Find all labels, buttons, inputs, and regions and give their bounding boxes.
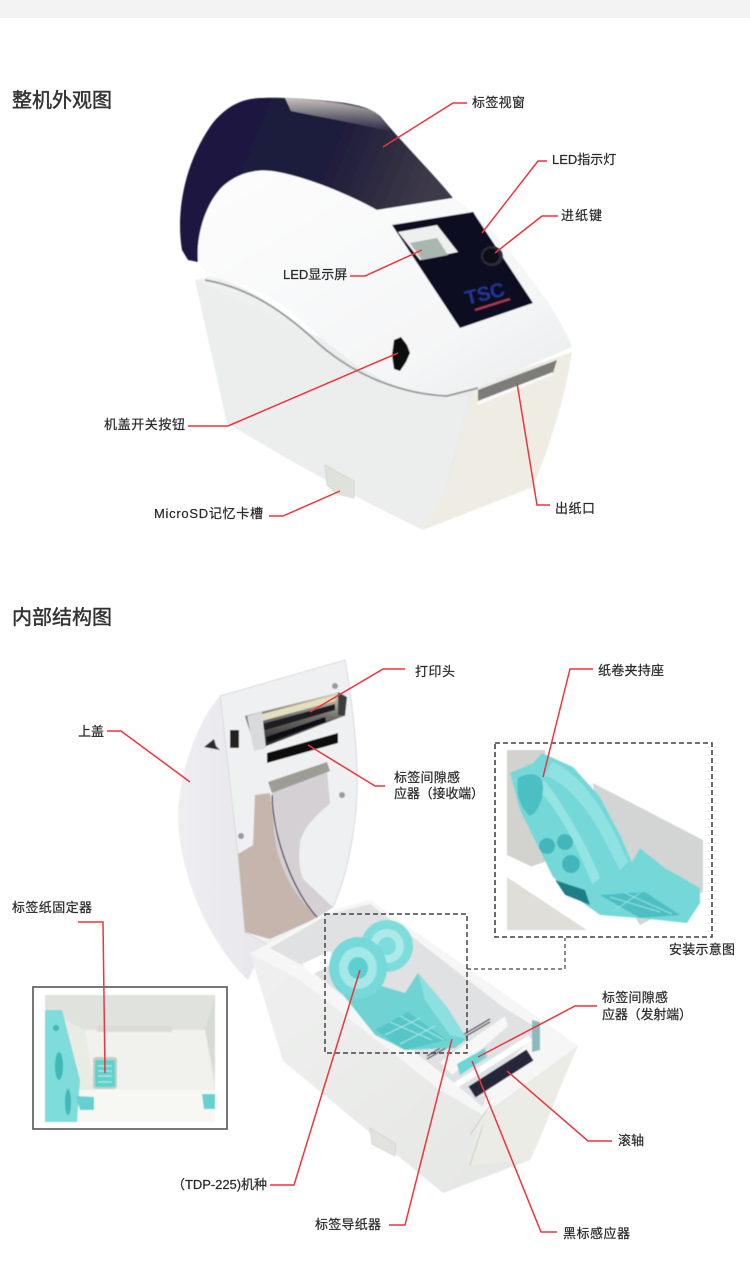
callout: black mark sensor (472, 1061, 630, 1241)
LED screen (398, 225, 458, 260)
callout: gap sensor receiver (308, 745, 484, 801)
callout: paper exit: 出纸口 (555, 501, 595, 516)
logo: TSC: TSC (463, 279, 507, 310)
gap sensor receiver bar (267, 733, 338, 763)
callout: paper roll holder (543, 663, 664, 777)
printer base (195, 276, 572, 530)
white top shell (198, 171, 572, 395)
base inner cavity (270, 904, 540, 1107)
base slot cover (370, 1128, 396, 1156)
top band (0, 0, 750, 18)
callout: TDP-225 model (172, 970, 360, 1192)
callout: cover release (104, 353, 398, 432)
callout: paper roll holder: 纸卷夹持座 (598, 663, 664, 678)
label fixer (93, 1057, 117, 1089)
callout: gap sensor receiver: 标签间隙感 (394, 770, 460, 785)
screw holes (238, 683, 345, 839)
callout: LED indicator: LED指示灯 (552, 152, 616, 167)
inset: installation detail (495, 743, 712, 937)
base outer body (250, 900, 578, 1193)
callout: feed key (495, 208, 602, 253)
front fold (470, 1046, 578, 1165)
callout: label window (383, 95, 525, 147)
callout: black mark sensor: 黑标感应器 (563, 1226, 630, 1241)
dashed connector (467, 938, 565, 969)
front face (423, 352, 572, 530)
inset: label holder detail (33, 987, 227, 1129)
callout: roller: 滚轴 (618, 1133, 644, 1148)
callout: MicroSD slot (154, 491, 340, 521)
callout: paper guide (315, 1039, 452, 1232)
inset photo (507, 750, 703, 930)
printer exterior illustration (180, 98, 572, 530)
inset photo (45, 995, 215, 1122)
callout: TDP-225 model: （TDP-225)机种 (172, 1177, 267, 1192)
callout: print head: 打印头 (415, 664, 455, 679)
paper exit slot (478, 360, 557, 405)
heading: exterior view: 整机外观图 (12, 89, 112, 112)
sensor emitter (457, 1048, 487, 1075)
callout: LED display (283, 250, 422, 282)
cover release button (392, 337, 410, 371)
lid inner surface (220, 660, 357, 946)
callout: paper exit (517, 383, 595, 516)
roller (456, 1038, 530, 1085)
callout: label holder: 标签纸固定器 (12, 900, 92, 915)
seam line (205, 280, 478, 396)
roller bracket (532, 1020, 540, 1052)
lid outer shell (178, 660, 357, 980)
callout: feed key: 进纸键 (561, 208, 602, 223)
callout: MicroSD slot: MicroSD记忆卡槽 (154, 506, 263, 521)
roll holder teal (510, 753, 700, 923)
callout: gap sensor emitter: 标签间隙感 (602, 990, 668, 1005)
feed button (481, 246, 503, 266)
callout: gap sensor receiver: 应器（接收端） (394, 786, 484, 801)
callout: cover release: 机盖开关按钮 (104, 417, 185, 432)
control panel (392, 212, 533, 328)
callout: label holder (12, 900, 105, 1073)
caption: installation diagram: 安装示意图 (669, 942, 735, 957)
callout: LED indicator (482, 152, 616, 233)
lid latch (204, 730, 239, 750)
dark label window cover (180, 98, 453, 262)
callout: roller (507, 1071, 644, 1148)
paper guide, teal (329, 920, 467, 1050)
callout: label window: 标签视窗 (472, 95, 525, 110)
heading: internal structure: 内部结构图 (12, 606, 112, 629)
callout: gap sensor emitter (478, 990, 692, 1057)
callout: print head (310, 664, 455, 712)
callout: paper guide: 标签导纸器 (315, 1217, 381, 1232)
lid inner brown lining (238, 793, 317, 939)
dashed highlight box (325, 914, 467, 1053)
callout: gap sensor emitter: 应器（发射端） (602, 1007, 692, 1022)
base rim (250, 900, 578, 1115)
callout: upper cover: 上盖 (78, 724, 104, 739)
callout: LED display: LED显示屏 (283, 267, 347, 282)
MicroSD slot cover (325, 465, 354, 498)
window highlight (285, 98, 392, 132)
print head (245, 692, 347, 751)
open printer illustration (178, 660, 578, 1193)
callout: upper cover (78, 724, 190, 782)
lid inner grey lining (272, 771, 333, 918)
